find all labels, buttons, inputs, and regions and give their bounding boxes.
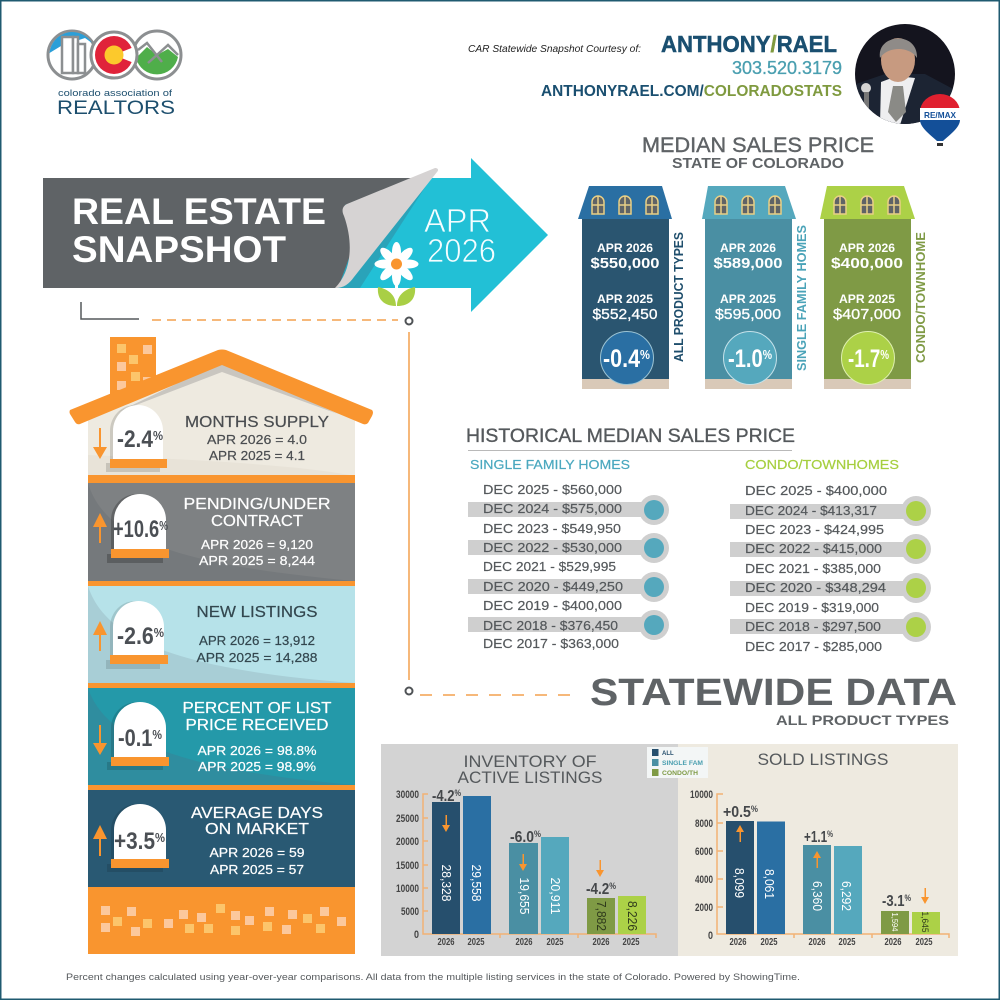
list: single family homes history: DEC 2018 - $376,450: [483, 618, 618, 633]
list: condo townhomes history: DEC 2023 - $424,995: [745, 522, 884, 537]
tombstone: list price change: %: [152, 727, 162, 742]
chart: inventory of active listings: 7,882: [594, 901, 608, 931]
panel: condo townhome house: -1.7: [848, 345, 891, 373]
phone number: 303.520.3179: [732, 58, 842, 78]
chart: inventory of active listings: 0: [414, 929, 419, 941]
chart: sold listings: 10000: [690, 789, 713, 801]
logo: Colorado Association of Realtors: REALTORS: [57, 98, 175, 119]
text: days on market: ON MARKET: [205, 821, 310, 838]
panel: single family homes house: -1.0: [728, 345, 771, 373]
chart: inventory of active listings: 2026: [592, 936, 610, 948]
panel: single family homes house: $589,000: [714, 255, 782, 272]
list: condo townhomes history: DEC 2020 - $348,294: [745, 580, 886, 595]
list: condo townhomes history: DEC 2022 - $415,000: [745, 541, 882, 556]
text: new listings: NEW LISTINGS: [196, 604, 318, 621]
chart: inventory of active listings: 15000: [396, 860, 419, 872]
tombstone: days on market change: %: [155, 830, 165, 845]
chart: sold listings: 1,645: [919, 912, 930, 932]
chart: inventory of active listings: %: [454, 788, 461, 798]
chart: sold listings: -3.1: [882, 893, 910, 910]
chart: inventory of active listings: 2025: [468, 936, 485, 948]
banner: Real Estate Snapshot: REAL ESTATE: [72, 191, 326, 232]
panel: percent of list price received: [88, 688, 355, 785]
icon: flower: [374, 242, 418, 306]
panel: new listings: [88, 586, 355, 683]
icon: RE/MAX balloon: RE/MAX: [924, 110, 956, 120]
tombstone: new listings change: [106, 601, 168, 669]
text: days on market: AVERAGE DAYS: [191, 805, 323, 822]
arrow: up: [93, 825, 107, 856]
house: roof: [70, 350, 373, 424]
chart: sold listings: %: [751, 804, 758, 814]
panel: condo townhome house: CONDO/TOWNHOME: [914, 232, 928, 363]
panel: months supply: [70, 350, 373, 476]
chart legend: CONDO/TH: [662, 771, 698, 777]
banner: Real Estate Snapshot: [43, 168, 438, 288]
chart: sold listings: 2025: [838, 936, 856, 948]
list: single family homes history: DEC 2025 - $560,000: [483, 482, 622, 497]
house: chimney: [110, 337, 156, 397]
chart: sold listings: 2025: [916, 936, 933, 948]
text: new listings: APR 2026 = 13,912: [199, 633, 315, 648]
tombstone: new listings change: -2.6: [117, 623, 158, 650]
panel: all product types house: ALL PRODUCT TYPES: [672, 232, 686, 362]
panel: condo townhome house: $400,000: [831, 255, 903, 272]
text: months supply: APR 2025 = 4.1: [209, 448, 305, 463]
list: condo townhomes history: DEC 2017 - $285,000: [745, 639, 882, 654]
panel: single family homes house: APR 2025: [720, 294, 777, 306]
chart: sold listings: 2026: [808, 936, 826, 948]
arrow: down: [93, 725, 107, 755]
chart: inventory of active listings: %: [534, 829, 541, 839]
chart: sold listings: %: [827, 829, 833, 839]
chart: sold listings: 6,360: [810, 881, 824, 911]
chart: inventory of active listings: [381, 744, 678, 956]
arrow: up: [93, 621, 107, 651]
text: list price: APR 2025 = 98.9%: [198, 759, 316, 774]
chart: inventory of active listings: 25000: [396, 813, 419, 825]
text: pending: [184, 496, 330, 568]
panel: single family homes house: APR 2026: [720, 243, 776, 255]
tombstone: new listings change: %: [154, 625, 164, 640]
list: single family homes history: DEC 2021 - $529,995: [483, 559, 616, 574]
list: condo townhomes history: DEC 2024 - $413,317: [745, 503, 877, 518]
chart: inventory of active listings: 30000: [396, 789, 419, 801]
list: condo townhomes history: [730, 457, 931, 654]
panel: condo townhome house: $407,000: [833, 307, 901, 323]
text: new listings: APR 2025 = 14,288: [196, 650, 318, 665]
tombstone: days on market change: [107, 804, 169, 872]
panel: single family homes house: [702, 186, 809, 389]
chart: sold listings: 6000: [695, 846, 713, 858]
chart: sold listings: 8,099: [732, 868, 746, 898]
text: months supply: APR 2026 = 4.0: [207, 432, 307, 447]
text: pending: CONTRACT: [211, 513, 304, 530]
panel: all product types house: $552,450: [592, 307, 658, 323]
divider band: [88, 785, 355, 790]
house foundation with bricks: [88, 887, 355, 954]
panel: single family homes house: %: [763, 347, 772, 362]
heading: median sales price: MEDIAN SALES PRICE: [642, 134, 874, 157]
chart: inventory of active listings: INVENTORY OF: [464, 752, 596, 771]
panel: all product types house: APR 2026: [597, 243, 653, 255]
logo: Colorado Association of Realtors: [48, 31, 181, 119]
tombstone: days on market change: +3.5: [114, 828, 161, 855]
tombstone: months supply change: -2.4: [117, 426, 158, 453]
chart: sold listings: 2000: [695, 902, 713, 914]
panel: condo townhome house: APR 2026: [839, 243, 895, 255]
chart: inventory of active listings: 28,328: [439, 864, 453, 902]
list: condo townhomes history: DEC 2025 - $400,000: [745, 483, 887, 498]
arrow: up: [93, 513, 107, 543]
connector lines: [81, 302, 576, 695]
courtesy line: CAR Statewide Snapshot Courtesy of:: [468, 43, 641, 55]
list: single family homes history: DEC 2022 - $530,000: [483, 540, 622, 555]
panel: single family homes house: SINGLE FAMILY HOMES: [795, 225, 809, 371]
chart: sold listings: +1.1: [804, 829, 836, 846]
website: ANTHONYRAEL.COM/COLORADOSTATS: [541, 83, 842, 100]
heading: statewide data: [590, 672, 957, 728]
chart: sold listings: 2026: [730, 936, 747, 948]
panel: pending under contract: [88, 483, 355, 581]
chart: sold listings: SOLD LISTINGS: [758, 750, 888, 769]
chart: inventory of active listings: -4.2: [586, 881, 614, 898]
chart: sold listings: 4000: [695, 874, 713, 886]
chart: sold listings: +0.5: [723, 804, 755, 821]
divider band: [88, 581, 355, 586]
chart: sold listings: [678, 744, 958, 956]
text: new listings: [196, 604, 318, 665]
tombstone: pending change: +10.6: [113, 516, 174, 543]
banner arrow: Apr 2026: [330, 158, 548, 312]
text: list price: PRICE RECEIVED: [186, 717, 328, 734]
tombstone: list price change: [107, 702, 169, 770]
logo: Colorado Association of Realtors: colorado association of: [58, 88, 172, 99]
tombstone: list price change: -0.1: [118, 725, 159, 752]
text: months supply: MONTHS SUPPLY: [185, 414, 329, 431]
list: condo townhomes history: CONDO/TOWNHOMES: [745, 457, 899, 472]
tombstone: pending change: [107, 494, 169, 563]
chart: inventory of active listings: 2026: [516, 936, 533, 948]
chart: sold listings: 8,061: [762, 869, 776, 899]
banner: Real Estate Snapshot: SNAPSHOT: [72, 229, 286, 270]
agent name: ANTHONY/RAEL: [661, 31, 837, 57]
chart: inventory of active listings: -6.0: [510, 829, 538, 846]
chart: inventory of active listings: 10000: [396, 883, 419, 895]
chart: sold listings: 2026: [884, 936, 902, 948]
chart: inventory of active listings: 8,226: [625, 901, 639, 931]
heading: statewide data: ALL PRODUCT TYPES: [776, 712, 949, 728]
footer note: Percent changes calculated using year-over-year comparisons. All data from the multiple listing services in the state of Colorado. Powered by ShowingTime.: [66, 972, 800, 983]
list: single family homes history: DEC 2023 - $549,950: [483, 521, 621, 536]
panel: condo townhome house: %: [880, 347, 889, 362]
agent photo: [855, 24, 955, 125]
chart: sold listings: %: [904, 893, 911, 903]
text: list price: APR 2026 = 98.8%: [198, 743, 317, 758]
list: single family homes history: DEC 2017 - $363,000: [483, 636, 619, 651]
chart: sold listings: 1,594: [890, 912, 899, 932]
text: pending: APR 2025 = 8,244: [199, 553, 315, 568]
chart: inventory of active listings: 20,911: [548, 878, 562, 915]
chart: inventory of active listings: 2025: [546, 936, 564, 948]
panel: single family homes house: $595,000: [715, 307, 781, 323]
panel: all product types house: %: [640, 347, 650, 362]
chart legend: ALL: [662, 751, 674, 757]
panel: all product types house: [578, 186, 686, 389]
list: single family homes history: DEC 2024 - $575,000: [483, 501, 622, 516]
text: list price: [182, 700, 332, 774]
divider band: [88, 475, 355, 483]
chart: inventory of active listings: 29,558: [469, 864, 483, 902]
text: months supply: [185, 414, 329, 463]
list: single family homes history: SINGLE FAMILY HOMES: [470, 457, 630, 472]
chart: inventory of active listings: %: [609, 881, 616, 891]
chart: inventory of active listings: 20000: [396, 836, 419, 848]
panel: condo townhome house: [820, 186, 928, 389]
chart: sold listings: 8000: [695, 818, 713, 830]
text: days on market: [191, 805, 323, 877]
tombstone: months supply change: %: [153, 428, 163, 443]
heading: statewide data: STATEWIDE DATA: [590, 672, 957, 714]
list: condo townhomes history: DEC 2021 - $385,000: [745, 561, 881, 576]
chart: inventory of active listings: 2025: [622, 936, 640, 948]
chart legend: SINGLE FAM: [662, 761, 703, 767]
arrow: down: [93, 428, 107, 459]
list: single family homes history: DEC 2020 - $449,250: [483, 579, 623, 594]
panel: condo townhome house: APR 2025: [839, 294, 896, 306]
chart legend: [647, 747, 708, 778]
heading: median sales price: [642, 134, 874, 172]
text: pending: PENDING/UNDER: [184, 496, 330, 513]
chart: inventory of active listings: 5000: [401, 906, 419, 918]
text: days on market: APR 2025 = 57: [210, 862, 304, 877]
list: single family homes history: [468, 457, 669, 651]
banner arrow: Apr 2026: APR: [424, 202, 491, 239]
panel: all product types house: APR 2025: [597, 294, 654, 306]
list: condo townhomes history: DEC 2018 - $297,500: [745, 619, 881, 634]
list: single family homes history: DEC 2019 - $400,000: [483, 598, 622, 613]
divider band: [88, 683, 355, 688]
tombstone: pending change: %: [159, 518, 168, 533]
panel: average days on market: [88, 790, 355, 887]
heading: median sales price: STATE OF COLORADO: [672, 155, 844, 172]
panel: all product types house: -0.4: [603, 345, 646, 373]
chart: sold listings: 6,292: [839, 881, 853, 911]
text: pending: APR 2026 = 9,120: [201, 537, 313, 552]
heading: historical median sales price: HISTORICAL MEDIAN SALES PRICE: [466, 426, 795, 447]
list: condo townhomes history: DEC 2019 - $319,000: [745, 600, 879, 615]
chart: inventory of active listings: 19,655: [517, 878, 531, 915]
banner arrow: Apr 2026: 2026: [427, 232, 496, 269]
icon: RE/MAX balloon: [920, 94, 960, 146]
chart: inventory of active listings: 2026: [438, 936, 455, 948]
text: days on market: APR 2026 = 59: [210, 845, 304, 860]
chart: sold listings: 2025: [760, 936, 778, 948]
chart: inventory of active listings: ACTIVE LISTINGS: [458, 768, 602, 787]
tombstone: months supply change: [106, 405, 167, 472]
text: list price: PERCENT OF LIST: [182, 700, 332, 717]
chart: sold listings: 0: [708, 930, 713, 942]
chart: inventory of active listings: -4.2: [432, 788, 460, 805]
panel: all product types house: $550,000: [590, 255, 660, 272]
